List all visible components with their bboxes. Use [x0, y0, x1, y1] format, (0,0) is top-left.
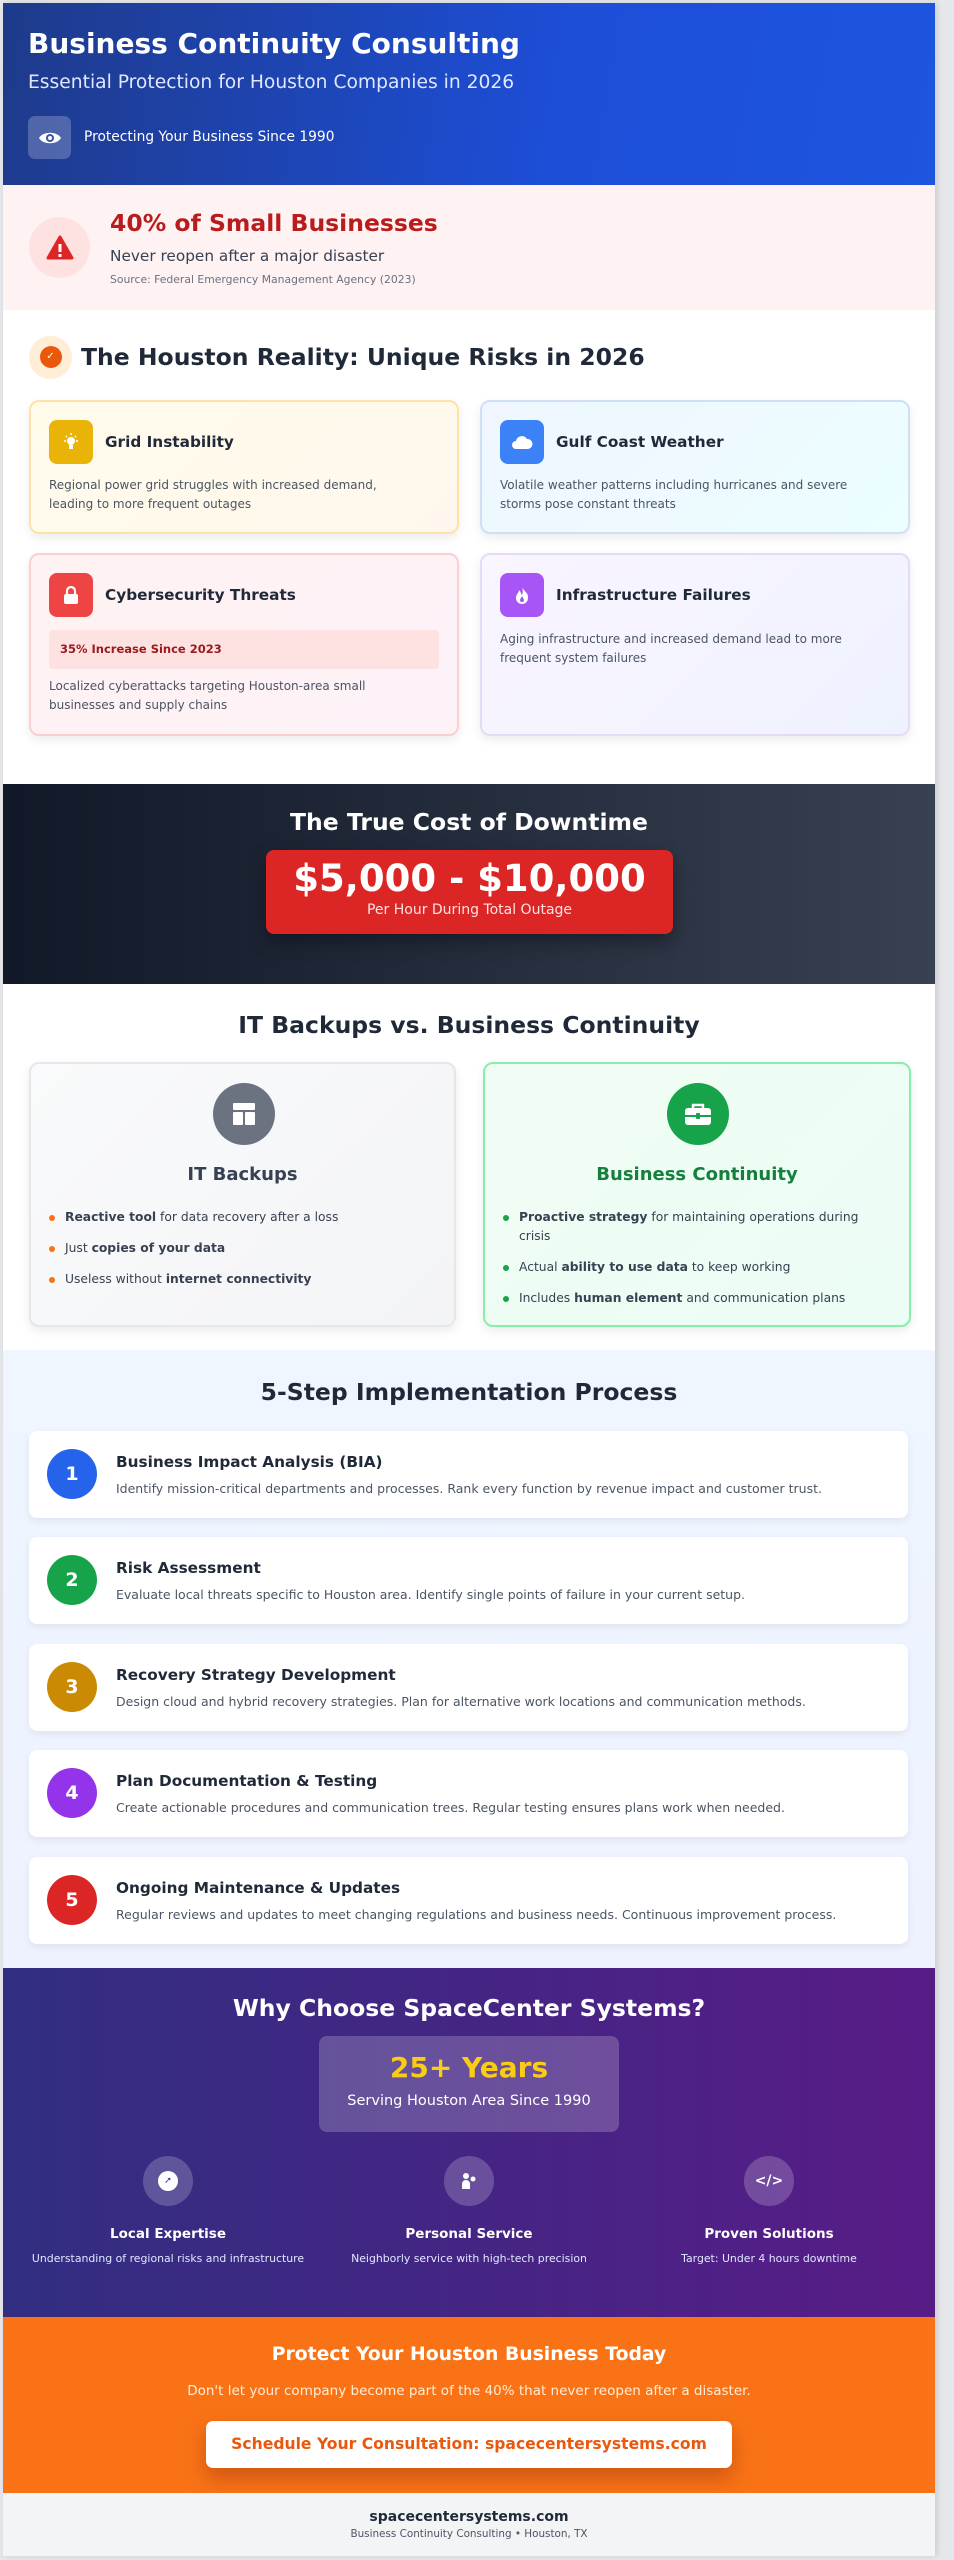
- heading: 5-Step Implementation Process: [261, 1378, 677, 1406]
- footer: Business Continuity Consulting • Houston, TX: [350, 2528, 588, 2540]
- panel: IT backups: Reactive tool for data recovery after a loss: [65, 1210, 338, 1224]
- feature: proven solutions: Proven Solutions: [704, 2226, 834, 2242]
- alert banner: [3, 185, 935, 310]
- step 4: Plan Documentation & Testing: [116, 1772, 377, 1790]
- footer: [3, 2493, 935, 2556]
- card: gulf coast weather: Volatile weather patterns including hurricanes and severe storms pose constant threats: [500, 478, 847, 511]
- panel: business continuity: Includes human element and communication plans: [519, 1291, 845, 1305]
- icon: gauge: [29, 336, 72, 378]
- feature: personal service: Neighborly service with high-tech precision: [351, 2252, 587, 2265]
- step 3: 3: [65, 1676, 79, 1698]
- card: gulf coast weather: Gulf Coast Weather: [556, 433, 724, 451]
- icon: flame: [500, 573, 544, 617]
- icon: bulb: [49, 420, 93, 464]
- section: houston risks: [3, 310, 935, 784]
- card: cybersecurity: Cybersecurity Threats: [105, 586, 296, 604]
- callout: years: 25+ Years: [390, 2051, 548, 2084]
- step 1: 1: [65, 1463, 79, 1485]
- badge: 35% Increase Since 2023: [60, 642, 222, 656]
- title: Business Continuity Consulting: [28, 27, 520, 60]
- card: infrastructure: Infrastructure Failures: [556, 586, 751, 604]
- heading: Why Choose SpaceCenter Systems?: [233, 1994, 705, 2022]
- step 4: Create actionable procedures and communication trees. Regular testing ensures plans work when needed.: [116, 1800, 785, 1815]
- heading: The Houston Reality: Unique Risks in 2026: [81, 343, 645, 371]
- source: Source: Federal Emergency Management Agency (2023): [110, 273, 416, 286]
- card: infrastructure: [480, 553, 910, 736]
- step 5: Regular reviews and updates to meet changing regulations and business needs. Continuous improvement process.: [116, 1907, 836, 1922]
- stat heading: 40% of Small Businesses: [110, 209, 438, 237]
- step 4: [29, 1750, 908, 1837]
- feature: local expertise: Understanding of regional risks and infrastructure: [32, 2252, 304, 2265]
- footer: spacecentersystems.com: [369, 2509, 569, 2525]
- heading: [29, 336, 645, 379]
- icon: cloud: [500, 420, 544, 464]
- panel: business continuity: [483, 1062, 911, 1327]
- card: grid instability: Grid Instability: [105, 433, 234, 451]
- step 3: Design cloud and hybrid recovery strategies. Plan for alternative work locations and communication methods.: [116, 1694, 806, 1709]
- icon: briefcase: [667, 1083, 729, 1145]
- callout: cost: [266, 850, 673, 934]
- icon: gauge: ✓: [46, 351, 55, 362]
- subtitle: Essential Protection for Houston Companies in 2026: [28, 72, 514, 93]
- step 1: Identify mission-critical departments and processes. Rank every function by revenue impact and customer trust.: [116, 1481, 822, 1496]
- step 2: [29, 1537, 908, 1624]
- heading: IT Backups vs. Business Continuity: [238, 1011, 700, 1039]
- panel: business continuity: Business Continuity: [596, 1164, 798, 1185]
- button: Schedule Your Consultation: spacecentersystems.com: [231, 2435, 707, 2453]
- step 3: [29, 1644, 908, 1731]
- callout: cost: Per Hour During Total Outage: [367, 902, 572, 918]
- section: cost of downtime: [3, 784, 935, 984]
- card: grid instability: Regional power grid struggles with increased demand, leading to more frequent outages: [49, 478, 377, 511]
- section: why choose: [3, 1968, 935, 2317]
- panel: IT backups: [29, 1062, 456, 1327]
- feature: local expertise: Local Expertise: [110, 2226, 226, 2242]
- step 2: 2: [65, 1569, 79, 1591]
- header: [3, 3, 935, 185]
- step 5: [29, 1857, 908, 1944]
- card: cybersecurity: Localized cyberattacks targeting Houston-area small businesses and supply chains: [49, 679, 366, 712]
- panel: business continuity: Actual ability to use data to keep working: [519, 1260, 790, 1274]
- step 2: Risk Assessment: [116, 1559, 261, 1577]
- feature: proven solutions: [681, 2156, 857, 2265]
- section: comparison: [3, 984, 935, 1350]
- card: cybersecurity: [29, 553, 459, 736]
- text: Don't let your company become part of the 40% that never reopen after a disaster.: [187, 2383, 751, 2399]
- feature: proven solutions: Target: Under 4 hours downtime: [681, 2252, 857, 2265]
- icon: warning: [29, 217, 90, 278]
- icon: eye: [28, 116, 71, 159]
- stat text: Never reopen after a major disaster: [110, 247, 384, 265]
- icon: lock: [49, 573, 93, 617]
- panel: IT backups: IT Backups: [187, 1164, 298, 1185]
- callout: years: [319, 2036, 619, 2132]
- panel: IT backups: Useless without internet connectivity: [65, 1272, 311, 1286]
- tagline: Protecting Your Business Since 1990: [84, 129, 334, 145]
- step 5: Ongoing Maintenance & Updates: [116, 1879, 400, 1897]
- callout: years: Serving Houston Area Since 1990: [347, 2093, 591, 2109]
- card: infrastructure: Aging infrastructure and increased demand lead to more frequent system failures: [500, 632, 842, 665]
- step 1: Business Impact Analysis (BIA): [116, 1453, 383, 1471]
- step 3: Recovery Strategy Development: [116, 1666, 396, 1684]
- feature: proven solutions: </>: [755, 2173, 783, 2189]
- card: grid instability: [29, 400, 459, 534]
- feature: personal service: [351, 2156, 587, 2265]
- step 4: 4: [65, 1782, 79, 1804]
- icon: layout: [213, 1083, 275, 1145]
- feature: local expertise: ➚: [164, 2176, 172, 2186]
- heading: Protect Your Houston Business Today: [272, 2344, 666, 2365]
- section: call to action: [3, 2317, 935, 2493]
- feature: personal service: Personal Service: [405, 2226, 533, 2242]
- card: gulf coast weather: [480, 400, 910, 534]
- step 5: 5: [65, 1889, 79, 1911]
- section: 5-step process: [3, 1350, 935, 1968]
- feature: local expertise: [32, 2156, 304, 2265]
- button: [206, 2421, 732, 2468]
- badge: [49, 630, 439, 669]
- callout: cost: $5,000 - $10,000: [293, 857, 646, 900]
- step 1: [29, 1431, 908, 1518]
- panel: business continuity: Proactive strategy for maintaining operations during crisis: [519, 1210, 858, 1243]
- heading: The True Cost of Downtime: [290, 808, 648, 836]
- panel: IT backups: Just copies of your data: [65, 1241, 225, 1255]
- step 2: Evaluate local threats specific to Houston area. Identify single points of failure in your current setup.: [116, 1587, 745, 1602]
